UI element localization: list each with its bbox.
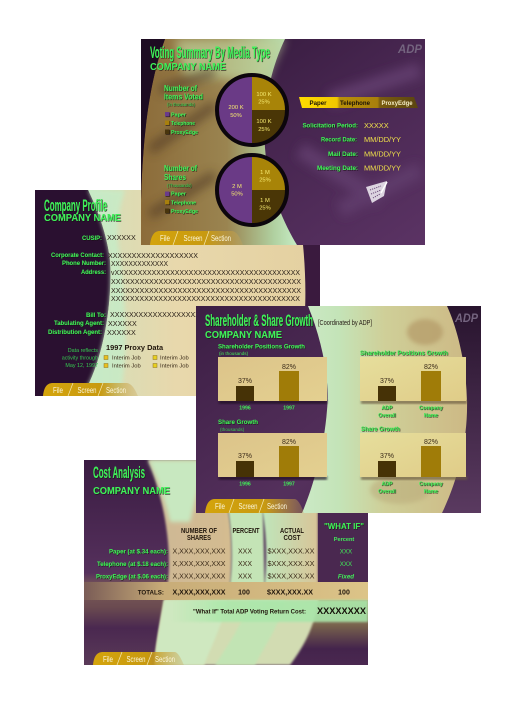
logo: ADP: [397, 42, 423, 56]
bar chart: share growth versus company: ADP: [382, 482, 393, 488]
navigation tabs: File: [103, 655, 113, 664]
navigation tabs: [93, 652, 184, 665]
legend: shares: (Thousands): [167, 183, 192, 188]
navigation tabs: Section: [267, 502, 287, 511]
data note: activity through: [62, 356, 98, 362]
profile field labels: Tabulating Agent:: [54, 320, 104, 327]
table rows: ProxyEdge (at $.06 each):: [96, 574, 168, 580]
panel background: [35, 190, 320, 396]
logo: ADP: [454, 311, 479, 325]
bar chart: shareholder positions by year: Shareholder Positions Growth: [218, 344, 305, 350]
bar chart: shareholder positions by year: [218, 344, 327, 412]
solicitation dates: XXXXX: [364, 121, 389, 130]
navigation tabs: File: [215, 502, 225, 511]
table rows: XXX: [340, 548, 352, 556]
navigation tabs: [205, 499, 304, 513]
navigation tabs: [150, 231, 243, 245]
panel: cost analysis: [84, 460, 368, 665]
table headers: COST: [284, 535, 301, 542]
pie chart: shares: 25%: [259, 206, 271, 212]
icon: ballot paper and pen: [366, 181, 387, 203]
profile field values: XXXXXX: [108, 319, 137, 328]
table rows: XXX: [238, 574, 252, 580]
bar chart: shareholder positions versus company: ADP: [382, 406, 393, 412]
bar chart: share growth by year: 1997: [283, 482, 295, 488]
pie chart: items voted: 100 K: [256, 92, 272, 98]
bar chart: share growth versus company: Name: [424, 489, 438, 495]
pie chart: items voted: 200 K: [228, 105, 244, 111]
pie chart: shares: [216, 154, 288, 226]
totals row: $XXX,XXX.XX: [267, 590, 313, 596]
profile field values: XXXXXXXXXXXXXXXXXXX: [110, 310, 200, 319]
media selector tabs: [299, 97, 418, 108]
navigation tabs: Screen: [78, 386, 96, 395]
profile field labels: Address:: [81, 269, 106, 276]
bar chart: shareholder positions by year: 1997: [283, 406, 295, 412]
bar chart: share growth versus company: Share Growth: [361, 426, 400, 433]
profile field values: [107, 233, 301, 337]
legend: items voted: [164, 84, 203, 136]
company name: COMPANY NAME: [150, 62, 226, 73]
legend: items voted: Items Voted: [164, 92, 203, 102]
pie chart: items voted: 25%: [258, 127, 270, 133]
legend: shares: Paper: [171, 192, 187, 198]
legend: shares: ProxyEdge: [171, 209, 198, 215]
bar chart: shareholder positions versus company: Shareholder Positions Growth: [360, 350, 448, 357]
pie chart: items voted: [216, 74, 288, 146]
table rows: [96, 548, 354, 580]
legend: items voted: Telephone: [171, 121, 195, 127]
navigation tabs: Section: [155, 655, 175, 664]
company name: COMPANY NAME: [44, 213, 121, 224]
table rows: X,XXX,XXX,XXX: [172, 548, 226, 556]
bar chart: shareholder positions by year: (in thousands): [219, 351, 249, 356]
what-if total: XXXXXXXX: [317, 606, 367, 617]
profile field values: XXXXXXXXXXXXX: [111, 259, 168, 268]
panel background: [84, 460, 368, 665]
table rows: Fixed: [338, 574, 354, 580]
pie chart: shares: 50%: [231, 192, 243, 198]
bar chart: shareholder positions versus company: 37%: [380, 378, 394, 385]
profile field values: XXXXXX: [107, 233, 136, 242]
totals row: [138, 590, 350, 596]
totals row: 100: [338, 590, 350, 596]
totals row: X,XXX,XXX,XXX: [172, 590, 226, 596]
bar chart: share growth by year: 37%: [238, 453, 252, 460]
navigation tabs: Section: [211, 234, 231, 243]
legend: shares: Shares: [164, 173, 186, 182]
bar chart: share growth versus company: 82%: [424, 439, 438, 446]
1997 proxy data legend: [104, 345, 188, 368]
profile field labels: Corporate Contact:: [51, 252, 104, 259]
bar chart: share growth by year: Share Growth: [218, 419, 258, 426]
1997 proxy data legend: Interim Job: [160, 364, 189, 370]
subtitle: [Coordinated by ADP]: [318, 318, 372, 327]
bar chart: share growth versus company: 37%: [380, 453, 394, 460]
table headers: SHARES: [187, 535, 211, 542]
media selector tabs: Telephone: [340, 100, 370, 107]
company name: COMPANY NAME: [93, 486, 170, 497]
table rows: X,XXX,XXX,XXX: [172, 561, 226, 568]
infographic: four overlapping ADP screens: [35, 39, 481, 665]
table rows: XXX: [238, 561, 252, 568]
panel background: [196, 306, 481, 513]
table headers: ACTUAL: [280, 528, 305, 535]
profile field values: XXXXXXXXXXXXXXXXXXX: [108, 251, 198, 260]
profile field labels: CUSIP:: [82, 235, 102, 242]
media selector tabs: Paper: [310, 100, 327, 107]
table headers: NUMBER OF: [181, 528, 218, 535]
table rows: X,XXX,XXX,XXX: [172, 574, 226, 580]
1997 proxy data legend: 1997 Proxy Data: [106, 343, 164, 352]
navigation tabs: Screen: [238, 502, 258, 511]
1997 proxy data legend: Interim Job: [112, 356, 141, 362]
navigation tabs: Screen: [184, 234, 202, 243]
navigation tabs: [43, 383, 138, 396]
totals row: TOTALS:: [138, 590, 164, 596]
what-if total: [193, 608, 366, 615]
table rows: Telephone (at $.18 each):: [97, 561, 168, 568]
table headers: Percent: [334, 537, 354, 543]
table rows: XXX: [340, 561, 352, 568]
bar chart: share growth by year: [218, 419, 327, 488]
bar chart: shareholder positions by year: 37%: [238, 378, 252, 385]
bar chart: share growth by year: (thousands): [220, 427, 245, 432]
bar chart: shareholder positions versus company: Name: [424, 413, 438, 419]
panel: company profile: [35, 190, 320, 396]
solicitation dates: Mail Date:: [328, 151, 358, 158]
panel: voting summary by media type: Voting Summary By Media Type: [150, 43, 270, 62]
legend: shares: Number of: [164, 164, 197, 173]
bar chart: share growth versus company: Overall: [378, 489, 396, 495]
solicitation dates: [302, 121, 401, 172]
table rows: $XXX,XXX.XX: [268, 561, 315, 568]
pie chart: items voted: 100 K: [256, 119, 272, 125]
panel: cost analysis: Cost Analysis: [93, 463, 145, 482]
pie chart: items voted: 25%: [258, 100, 270, 106]
pie chart: shares: 1 M: [260, 198, 270, 204]
solicitation dates: MM/DD/YY: [364, 164, 401, 172]
1997 proxy data legend: Interim Job: [160, 356, 189, 362]
legend: items voted: (in thousands): [167, 102, 195, 107]
panel: shareholder and share growth: [196, 306, 481, 513]
data note: Data reflects: [68, 348, 98, 354]
navigation tabs: File: [53, 386, 63, 395]
bar chart: shareholder positions versus company: Overall: [378, 413, 396, 419]
profile field labels: Distribution Agent:: [48, 329, 102, 336]
profile field labels: [48, 235, 106, 336]
pie chart: shares: 2 M: [232, 184, 242, 190]
bar chart: share growth versus company: [360, 426, 467, 495]
bar chart: share growth versus company: Company: [419, 482, 443, 488]
legend: shares: [164, 164, 198, 215]
bar chart: shareholder positions by year: 1996: [239, 406, 251, 412]
1997 proxy data legend: Interim Job: [112, 364, 141, 370]
navigation tabs: Screen: [126, 655, 146, 664]
solicitation dates: MM/DD/YY: [364, 150, 401, 158]
legend: shares: Telephone: [171, 200, 196, 206]
data note: May 12, 1997: [65, 363, 98, 369]
pie chart: items voted: 50%: [230, 113, 242, 119]
profile field values: XXXXXXXXXXXXXXXXXXXXXXXXXXXXXXXXXXXXXXXX: [111, 286, 301, 295]
totals row: 100: [238, 590, 250, 596]
panel: voting summary by media type: [141, 39, 425, 245]
solicitation dates: Meeting Date:: [317, 165, 358, 172]
table headers: "WHAT IF": [324, 521, 364, 531]
profile field values: vXXXXXXXXXXXXXXXXXXXXXXXXXXXXXXXXXXXXXXXX: [111, 268, 300, 277]
legend: items voted: Paper: [171, 112, 187, 118]
what-if total: "What If" Total ADP Voting Return Cost:: [193, 610, 306, 616]
bar chart: shareholder positions versus company: 82%: [424, 364, 438, 371]
pie chart: shares: 25%: [259, 178, 271, 184]
legend: items voted: Number of: [164, 84, 197, 93]
panel: company profile: Company Profile: [44, 196, 107, 215]
bar chart: shareholder positions by year: 82%: [282, 364, 296, 371]
profile field labels: Bill To:: [86, 312, 106, 319]
navigation tabs: File: [160, 234, 170, 243]
table rows: $XXX,XXX.XX: [268, 548, 315, 556]
pie chart: shares: 1 M: [260, 170, 270, 176]
table headers: PERCENT: [232, 528, 260, 535]
bar chart: share growth by year: 1996: [239, 482, 251, 488]
profile field labels: Phone Number:: [62, 260, 106, 267]
table rows: $XXX,XXX.XX: [268, 574, 315, 580]
profile field values: XXXXXXXXXXXXXXXXXXXXXXXXXXXXXXXXXXXXXXXX: [111, 294, 300, 303]
panel background: [141, 39, 425, 245]
solicitation dates: Record Date:: [321, 136, 357, 144]
bar chart: share growth by year: 82%: [282, 439, 296, 446]
bar chart: shareholder positions versus company: [360, 350, 467, 419]
profile field values: XXXXXX: [107, 328, 136, 337]
table rows: Paper (at $.34 each):: [109, 548, 168, 556]
panel: shareholder and share growth: Shareholder & Share Growth: [205, 311, 313, 330]
solicitation dates: MM/DD/YY: [364, 135, 401, 144]
company name: COMPANY NAME: [205, 330, 282, 341]
navigation tabs: Section: [106, 386, 126, 395]
profile field values: XXXXXXXXXXXXXXXXXXXXXXXXXXXXXXXXXXXXXXXX: [111, 277, 301, 286]
legend: items voted: ProxyEdge: [171, 130, 198, 136]
bar chart: shareholder positions versus company: Company: [419, 406, 443, 412]
table rows: XXX: [238, 548, 252, 556]
media selector tabs: ProxyEdge: [382, 100, 413, 107]
table headers: [181, 523, 364, 541]
solicitation dates: Solicitation Period:: [302, 122, 358, 130]
data note: [62, 348, 98, 369]
